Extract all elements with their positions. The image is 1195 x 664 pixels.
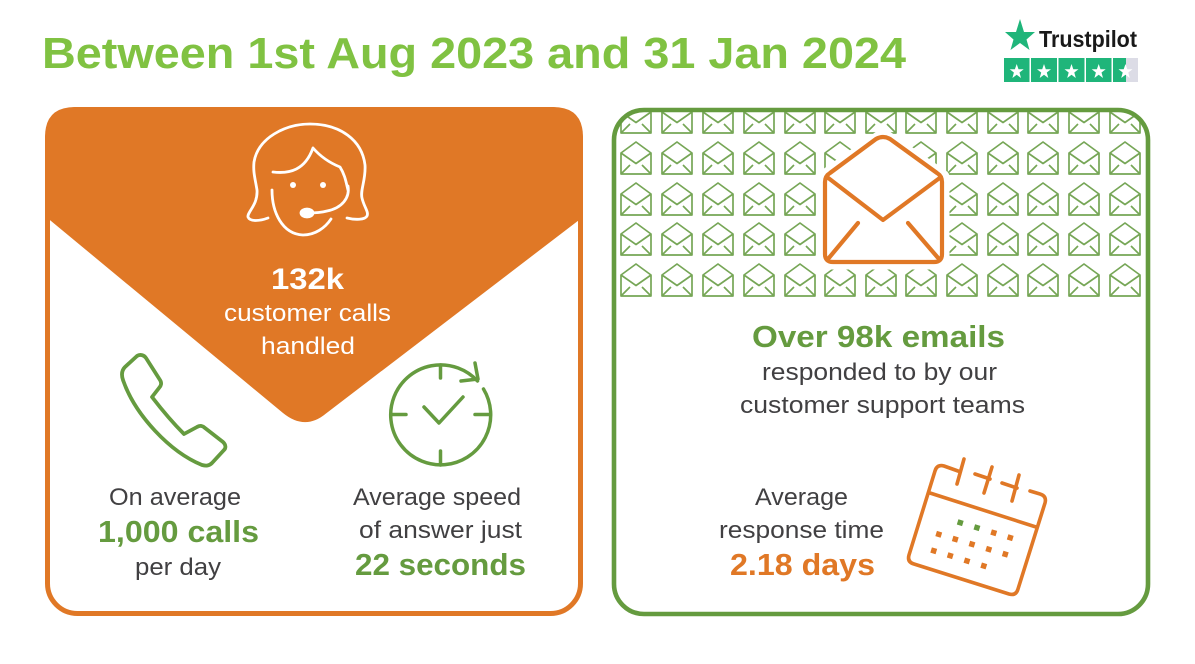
envelope pattern — [621, 101, 1140, 296]
icon: support agent — [248, 124, 367, 235]
orange banner — [45, 107, 583, 422]
stat: 132k customer calls handled: handled — [261, 333, 355, 360]
stat: 1,000 calls per day: per day — [135, 554, 221, 581]
panel background — [614, 110, 1148, 614]
stat: average response time: 2.18 days — [730, 547, 875, 582]
stat: over 98k emails: responded to by our — [762, 359, 997, 386]
panel: customer emails — [614, 101, 1148, 614]
stat: 132k customer calls handled: 132k — [271, 263, 344, 296]
stat: 22 seconds speed of answer: 22 seconds — [355, 547, 526, 582]
stat: 1,000 calls per day: On average — [109, 484, 241, 511]
stat: over 98k emails: Over 98k emails — [752, 319, 1005, 354]
Trustpilot rating logo — [1004, 19, 1138, 82]
title: Between 1st Aug 2023 and 31 Jan 2024 — [42, 29, 907, 78]
stat: average response time — [719, 484, 884, 582]
icon: clock with tick — [391, 363, 491, 465]
stat: 132k customer calls handled — [224, 263, 391, 360]
stat: 22 seconds speed of answer: Average speed — [353, 484, 521, 511]
stat: over 98k emails — [740, 319, 1025, 419]
stat: 1,000 calls per day — [98, 484, 259, 581]
stat: average response time: response time — [719, 517, 884, 544]
rating stars — [1004, 58, 1138, 82]
panel: customer calls — [45, 107, 583, 614]
icon: calendar — [909, 459, 1045, 594]
icon: telephone — [122, 355, 225, 466]
icon: Trustpilot star — [1005, 19, 1035, 50]
panel outline — [614, 110, 1148, 614]
stat: 22 seconds speed of answer: of answer just — [359, 517, 522, 544]
stat: 22 seconds speed of answer — [353, 484, 526, 582]
stat: average response time: Average — [755, 484, 848, 511]
stat: 1,000 calls per day: 1,000 calls — [98, 514, 259, 549]
Trustpilot wordmark: Trustpilot — [1039, 26, 1137, 52]
panel outline — [48, 110, 580, 614]
stat: over 98k emails: customer support teams — [740, 392, 1025, 419]
icon: large open envelope — [825, 136, 942, 262]
stat: 132k customer calls handled: customer calls — [224, 300, 391, 327]
